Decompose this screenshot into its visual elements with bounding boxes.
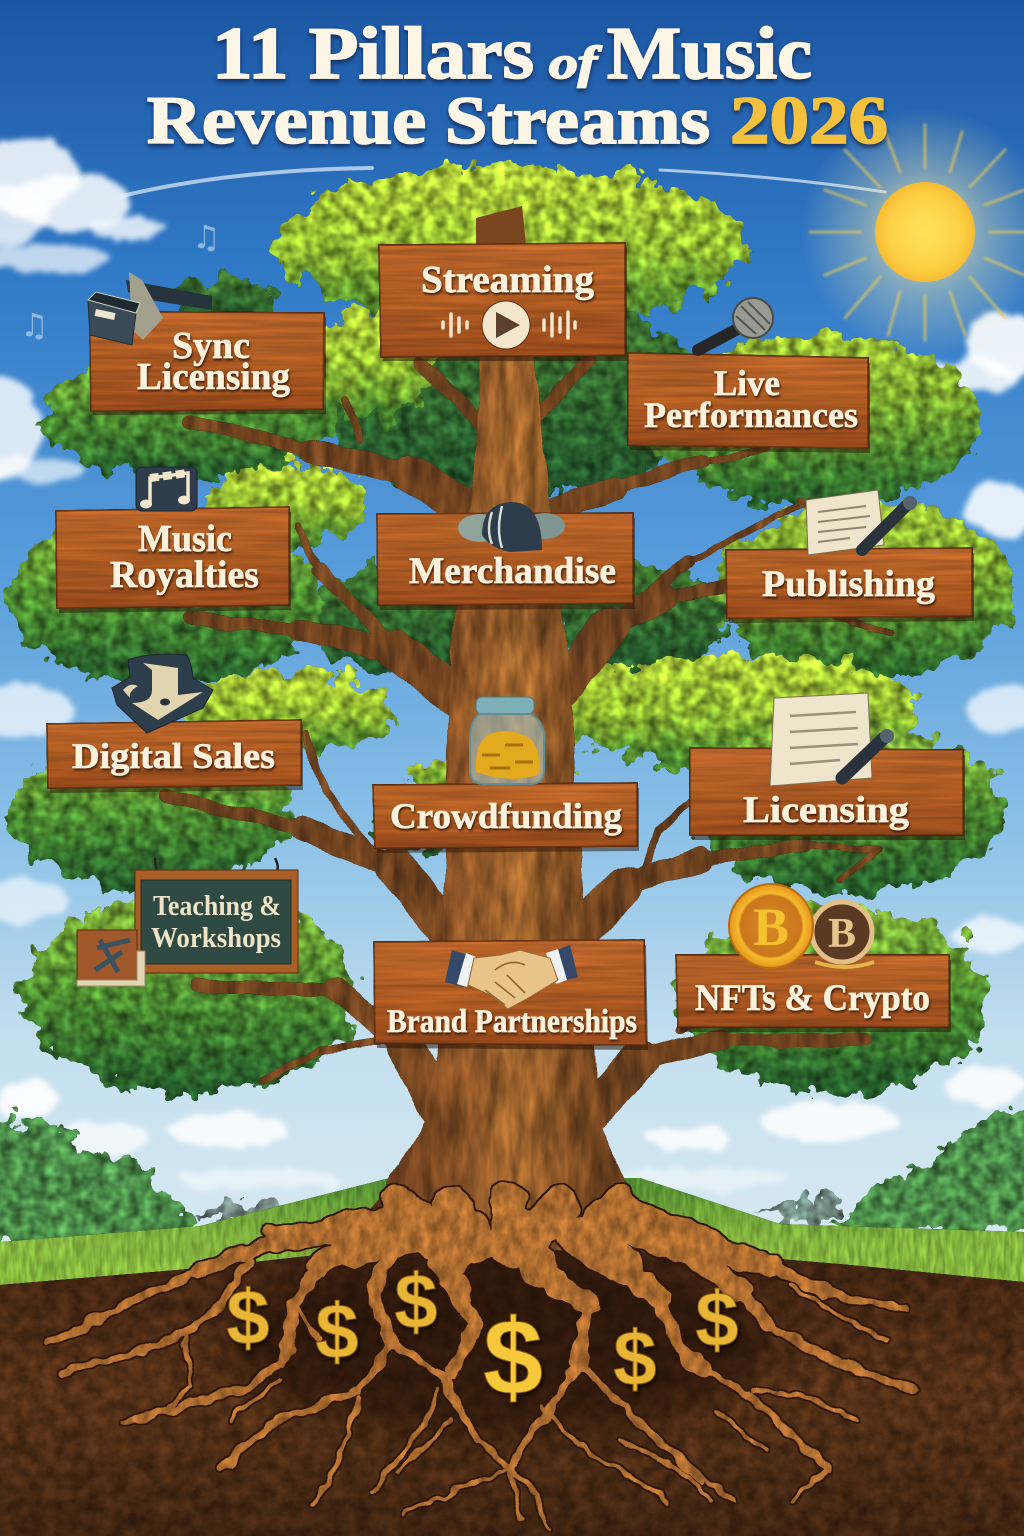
grass ground (0, 1178, 1024, 1300)
icon: crypto coins: B (828, 911, 856, 957)
sun (800, 107, 1024, 357)
dark background canopy (310, 290, 725, 850)
tree trunk and branches (165, 215, 890, 1250)
sky streaks (122, 168, 885, 196)
sign: Streaming (379, 243, 627, 361)
title (147, 13, 888, 158)
sign: NFTs & Crypto: NFTs & Crypto (695, 978, 930, 1019)
icon: coin jar (470, 697, 544, 784)
dollar signs (226, 1257, 739, 1417)
decorative music notes: ♫ (192, 218, 221, 256)
sign: Teaching & Workshops chalkboard: Teaching & (153, 891, 281, 922)
sign: Digital Sales: Digital Sales (72, 736, 275, 776)
sign: Music Royalties: Royalties (110, 554, 259, 596)
sign: Music Royalties (56, 467, 291, 613)
sign: Teaching & Workshops chalkboard (77, 858, 298, 986)
sign: Licensing: Licensing (743, 790, 910, 831)
dollar signs: $ (695, 1275, 739, 1363)
icon: document and pen (770, 693, 894, 786)
icon: crypto coins: B (753, 897, 789, 957)
sign: Live Performances: Performances (644, 395, 858, 435)
title: 2026 (730, 82, 888, 158)
icon: digital music badge (112, 654, 213, 733)
soil ground (0, 1248, 1024, 1536)
sign: Merchandise: Merchandise (409, 551, 616, 592)
sign: Publishing (726, 490, 974, 623)
distant trees (0, 1100, 1024, 1245)
dollar signs: $ (483, 1296, 543, 1417)
dollar signs: $ (394, 1257, 438, 1345)
sign: Sync Licensing: Sync (172, 325, 250, 367)
title: of (549, 37, 603, 88)
icon: paper and pen (806, 490, 917, 555)
icon: play button with sound waves (443, 301, 575, 349)
sign: Streaming: Streaming (421, 259, 594, 301)
icon: microphone (698, 298, 773, 350)
sign: Crowdfunding: Crowdfunding (390, 796, 622, 836)
dark soil shadow around roots (230, 1255, 770, 1435)
tree canopy clusters (7, 165, 1015, 1095)
sign: Music Royalties: Music (138, 518, 232, 560)
icon: crypto coins (729, 884, 874, 968)
decorative music notes: ♫ (20, 306, 49, 344)
dollar signs: $ (226, 1273, 270, 1361)
sign: Crowdfunding (373, 697, 639, 853)
top stump (476, 206, 526, 245)
sign: Brand Partnerships (374, 940, 648, 1050)
icon: music note badge (136, 467, 197, 511)
title: 11 Pillars (212, 13, 534, 95)
title: Revenue Streams (147, 82, 710, 158)
dollar signs: $ (315, 1287, 359, 1375)
icon: film clapper (88, 272, 212, 345)
sign: Merchandise (377, 502, 635, 610)
icon: tools (77, 930, 145, 986)
dollar signs: $ (613, 1314, 657, 1402)
sign: Publishing: Publishing (762, 564, 936, 605)
sign: Digital Sales (47, 654, 303, 793)
decorative music notes (20, 218, 221, 344)
icon: handshake (445, 945, 578, 1009)
icon: baseball cap (458, 502, 565, 552)
clouds (0, 137, 1024, 1192)
sign: Teaching & Workshops chalkboard: Workshops (151, 923, 281, 954)
sign: Sync Licensing: Licensing (137, 356, 290, 398)
sign: Live Performances: Live (714, 363, 780, 403)
sign: Licensing (690, 693, 965, 840)
sign: Brand Partnerships: Brand Partnerships (387, 1004, 637, 1040)
title: Music (607, 13, 812, 95)
sign: NFTs & Crypto (676, 884, 951, 1032)
sign: Live Performances (628, 298, 870, 453)
sign: Sync Licensing (88, 272, 326, 415)
roots (49, 1200, 915, 1530)
